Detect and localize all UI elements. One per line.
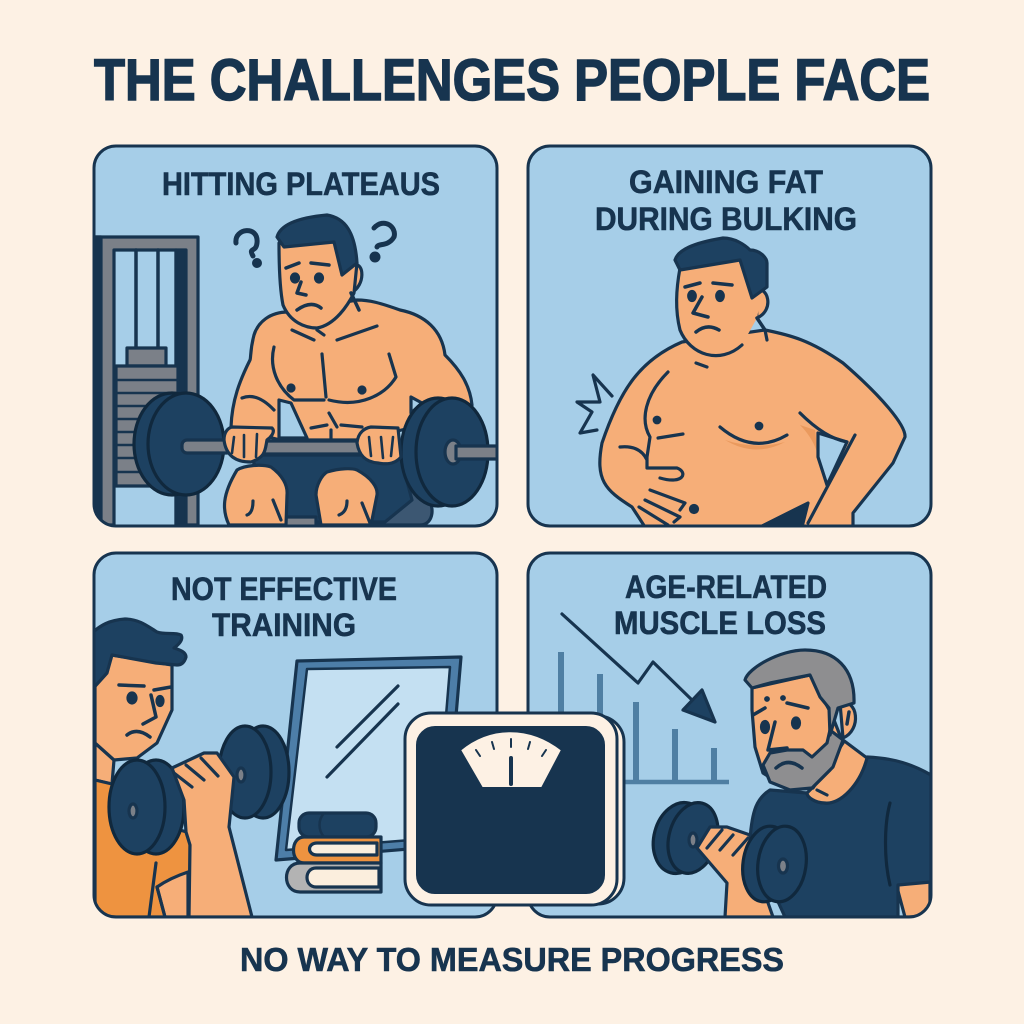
man legs and shorts — [224, 455, 432, 527]
pain mark — [577, 375, 612, 433]
man head — [745, 650, 855, 790]
heading: gaining fat: GAINING FAT — [629, 164, 823, 200]
heading: gaining fat: DURING BULKING — [595, 201, 857, 237]
panel: not effective training — [90, 553, 497, 917]
heading: not effective training — [171, 571, 397, 643]
man head — [277, 215, 362, 328]
dumbbell and arm — [109, 726, 289, 917]
man belly body — [600, 330, 905, 527]
question marks — [236, 223, 394, 266]
caption: NO WAY TO MEASURE PROGRESS — [240, 942, 784, 979]
books — [286, 813, 381, 892]
man torso — [750, 740, 931, 917]
man head — [675, 238, 768, 356]
heading: age-related muscle loss — [614, 569, 827, 641]
heading: age-related muscle loss: AGE-RELATED — [625, 569, 827, 605]
barbell — [134, 393, 501, 506]
scale dial — [460, 731, 562, 788]
downward arrow — [562, 614, 715, 722]
gym machine — [94, 237, 198, 525]
icon: bathroom scale — [405, 713, 624, 905]
man torso — [95, 743, 190, 917]
man head — [90, 619, 186, 760]
heading: age-related muscle loss: MUSCLE LOSS — [614, 605, 826, 641]
declining bar chart — [555, 652, 729, 782]
title: THE CHALLENGES PEOPLE FACE — [94, 48, 930, 113]
mirror — [276, 657, 461, 860]
heading: gaining fat — [595, 164, 857, 237]
heading: not effective training: NOT EFFECTIVE — [171, 571, 397, 607]
man torso — [231, 300, 472, 440]
panel: gaining fat — [528, 146, 931, 527]
panel: hitting plateaus — [94, 146, 501, 527]
heading: not effective training: TRAINING — [212, 607, 356, 643]
arm with dumbbell — [646, 796, 811, 917]
panel: age-related muscle loss — [528, 553, 931, 917]
heading: hitting plateaus: HITTING PLATEAUS — [162, 166, 440, 202]
